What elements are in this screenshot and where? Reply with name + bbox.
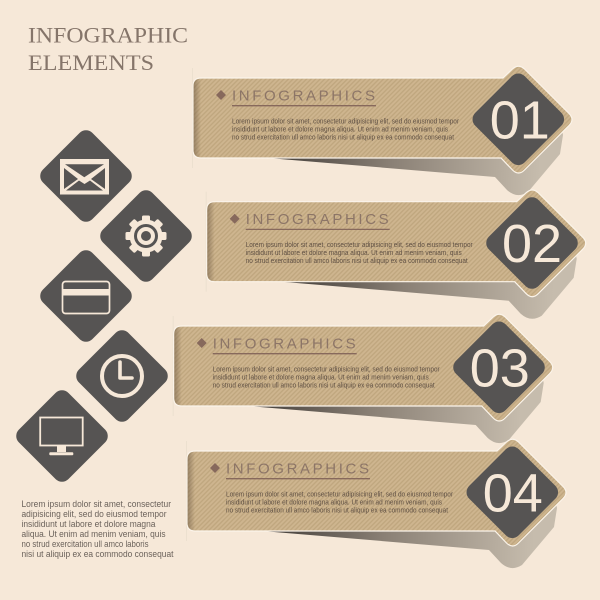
heading: INFOGRAPHICS bbox=[246, 211, 389, 228]
body text: insididunt ut labore et dolore magna aliqua. Ut enim ad menim veniam, quis bbox=[213, 372, 429, 382]
body text: Lorem ipsum dolor sit amet, consectetur adipisicing elit, sed do eiusmod tempor bbox=[213, 364, 440, 374]
heading bullet bbox=[210, 463, 220, 473]
icon: envelope diamond bbox=[37, 127, 135, 225]
banner shadow bbox=[262, 493, 557, 568]
panel: banner 03 bbox=[173, 314, 553, 443]
title bbox=[28, 22, 188, 75]
banner body bbox=[207, 190, 586, 297]
number badge bbox=[483, 194, 581, 292]
number badge bbox=[463, 443, 562, 542]
banner shadow bbox=[268, 120, 563, 195]
banner shadow bbox=[249, 368, 544, 443]
heading bullet bbox=[197, 338, 207, 348]
banner body bbox=[193, 66, 572, 173]
body text: no strud exercitation ull amco laboris nisi ut aliquip ex ea commodo consequat bbox=[213, 380, 435, 390]
text block: intro paragraph: insididunt ut labore et dolore magna bbox=[22, 519, 156, 529]
body text bbox=[213, 364, 440, 390]
text block: intro paragraph: Lorem ipsum dolor sit amet, consectetur bbox=[22, 499, 171, 509]
text block: intro paragraph bbox=[22, 499, 174, 559]
heading: INFOGRAPHICS bbox=[226, 460, 369, 478]
number badge: 02 bbox=[502, 214, 562, 274]
body text: Lorem ipsum dolor sit amet, consectetur adipisicing elit, sed do eiusmod tempor bbox=[246, 240, 473, 249]
body text bbox=[226, 490, 454, 514]
icon: monitor diamond bbox=[13, 387, 111, 485]
heading: INFOGRAPHICS bbox=[232, 88, 375, 104]
number badge bbox=[469, 70, 568, 169]
number badge: 01 bbox=[490, 90, 550, 150]
title: ELEMENTS bbox=[28, 50, 154, 75]
number badge: 03 bbox=[470, 338, 530, 398]
body text: no strud exercitation ull amco laboris nisi ut aliquip ex ea commodo consequat bbox=[226, 506, 448, 514]
banner shadow bbox=[282, 244, 577, 319]
panel: banner 04 bbox=[186, 439, 566, 568]
heading: INFOGRAPHICS bbox=[213, 336, 356, 352]
body text: insididunt ut labore et dolore magna aliqua. Ut enim ad menim veniam, quis bbox=[232, 124, 448, 134]
text block: intro paragraph: adipisicing elit, sed do eiusmod tempor bbox=[22, 509, 166, 519]
body text: Lorem ipsum dolor sit amet, consectetur adipisicing elit, sed do eiusmod tempor bbox=[232, 116, 460, 126]
heading bullet bbox=[230, 214, 240, 224]
number badge: 04 bbox=[483, 464, 543, 524]
banner body bbox=[187, 439, 566, 546]
number badge bbox=[450, 318, 548, 417]
icon: credit card diamond bbox=[37, 247, 135, 345]
icon: gear diamond bbox=[97, 187, 195, 285]
body text: no strud exercitation ull amco laboris nisi ut aliquip ex ea commodo consequat bbox=[246, 256, 468, 265]
body text bbox=[232, 116, 460, 142]
text block: intro paragraph: no strud exercitation ull amco laboris bbox=[22, 539, 149, 549]
panel: banner 02 bbox=[206, 190, 586, 319]
banner body bbox=[174, 314, 553, 421]
text block: intro paragraph: nisi ut aliquip ex ea commodo consequat bbox=[22, 549, 174, 559]
icon: clock diamond bbox=[73, 327, 171, 425]
heading bullet bbox=[216, 90, 226, 100]
panel: banner 01 bbox=[192, 66, 572, 195]
body text: Lorem ipsum dolor sit amet, consectetur adipisicing elit, sed do eiusmod tempor bbox=[226, 490, 454, 498]
body text: no strud exercitation ull amco laboris nisi ut aliquip ex ea commodo consequat bbox=[232, 132, 454, 142]
body text: insididunt ut labore et dolore magna aliqua. Ut enim ad menim veniam, quis bbox=[246, 248, 462, 257]
body text: insididunt ut labore et dolore magna aliqua. Ut enim ad menim veniam, quis bbox=[226, 498, 442, 506]
body text bbox=[246, 240, 473, 265]
text block: intro paragraph: aliqua. Ut enim ad menim veniam, quis bbox=[22, 529, 166, 539]
title: INFOGRAPHIC bbox=[28, 22, 188, 48]
